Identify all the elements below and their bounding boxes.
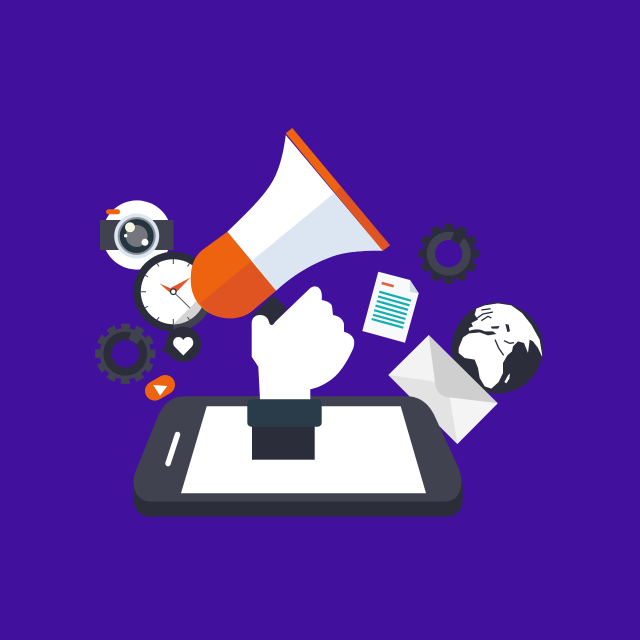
icon: clock [133, 252, 213, 332]
rim [286, 128, 390, 251]
seas [468, 329, 496, 335]
fist [252, 286, 354, 400]
illustration: mobile marketing megaphone [95, 128, 543, 517]
home button [168, 434, 178, 464]
phone base [133, 483, 463, 517]
phone body [134, 396, 461, 502]
hand holding megaphone [247, 286, 354, 460]
sleeve [252, 420, 315, 460]
smartphone [133, 396, 463, 517]
screen [181, 406, 426, 493]
handle [252, 296, 287, 325]
cuff [247, 399, 322, 427]
continents [459, 303, 543, 389]
icon: right gear [422, 227, 476, 281]
icon: envelope [388, 335, 498, 444]
megaphone [191, 128, 390, 325]
icon: globe [452, 302, 543, 393]
icon: heart speech bubble [161, 327, 201, 362]
body [191, 232, 276, 318]
icon: left gear [98, 327, 152, 381]
icon: camera [100, 200, 174, 270]
icon: play button [141, 371, 179, 404]
icon: document [362, 272, 419, 343]
cone [227, 135, 383, 291]
